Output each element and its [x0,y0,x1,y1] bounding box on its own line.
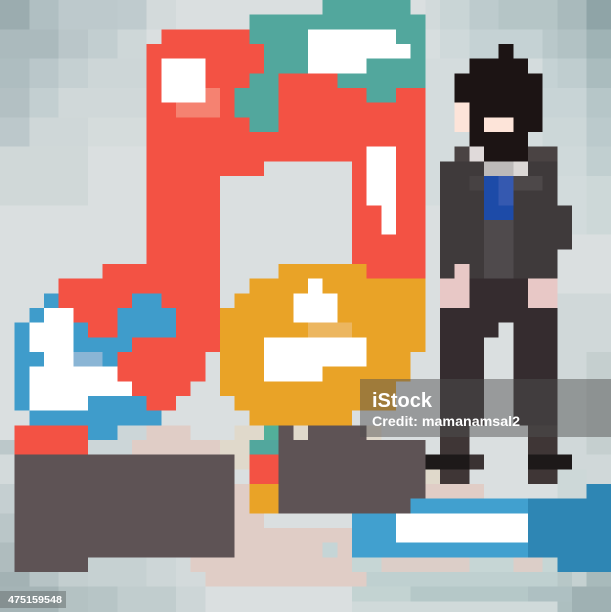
blue note white highlight [29,308,132,411]
watermark credit text: Credit: mamanamsal2 [372,414,520,429]
man: blue tie [484,176,513,220]
image id label: 475159548 [8,594,62,606]
man: shoes [425,455,572,469]
pixel man with beard and suit [425,44,572,484]
watermark band [360,379,611,437]
red music note [59,29,425,411]
man: hands [440,264,557,308]
image id label [0,591,66,608]
blue note shape [15,293,176,440]
blue bottom-right bar [352,484,611,572]
man: hair and beard [455,44,543,161]
central dark block [279,425,425,513]
orange circle highlights [264,279,367,381]
man: suit jacket [440,147,572,279]
teal cloud shape [235,0,425,132]
red note highlights [161,59,396,235]
watermark logo text: iStock [372,390,433,412]
teal, red and orange colour stack [249,425,279,513]
man: face skin [455,103,513,132]
orange circle [220,264,425,425]
red bar and large dark block [15,425,235,572]
man: trousers [440,279,557,484]
teal cloud white highlight [308,29,411,73]
man: shirt front [469,147,543,279]
